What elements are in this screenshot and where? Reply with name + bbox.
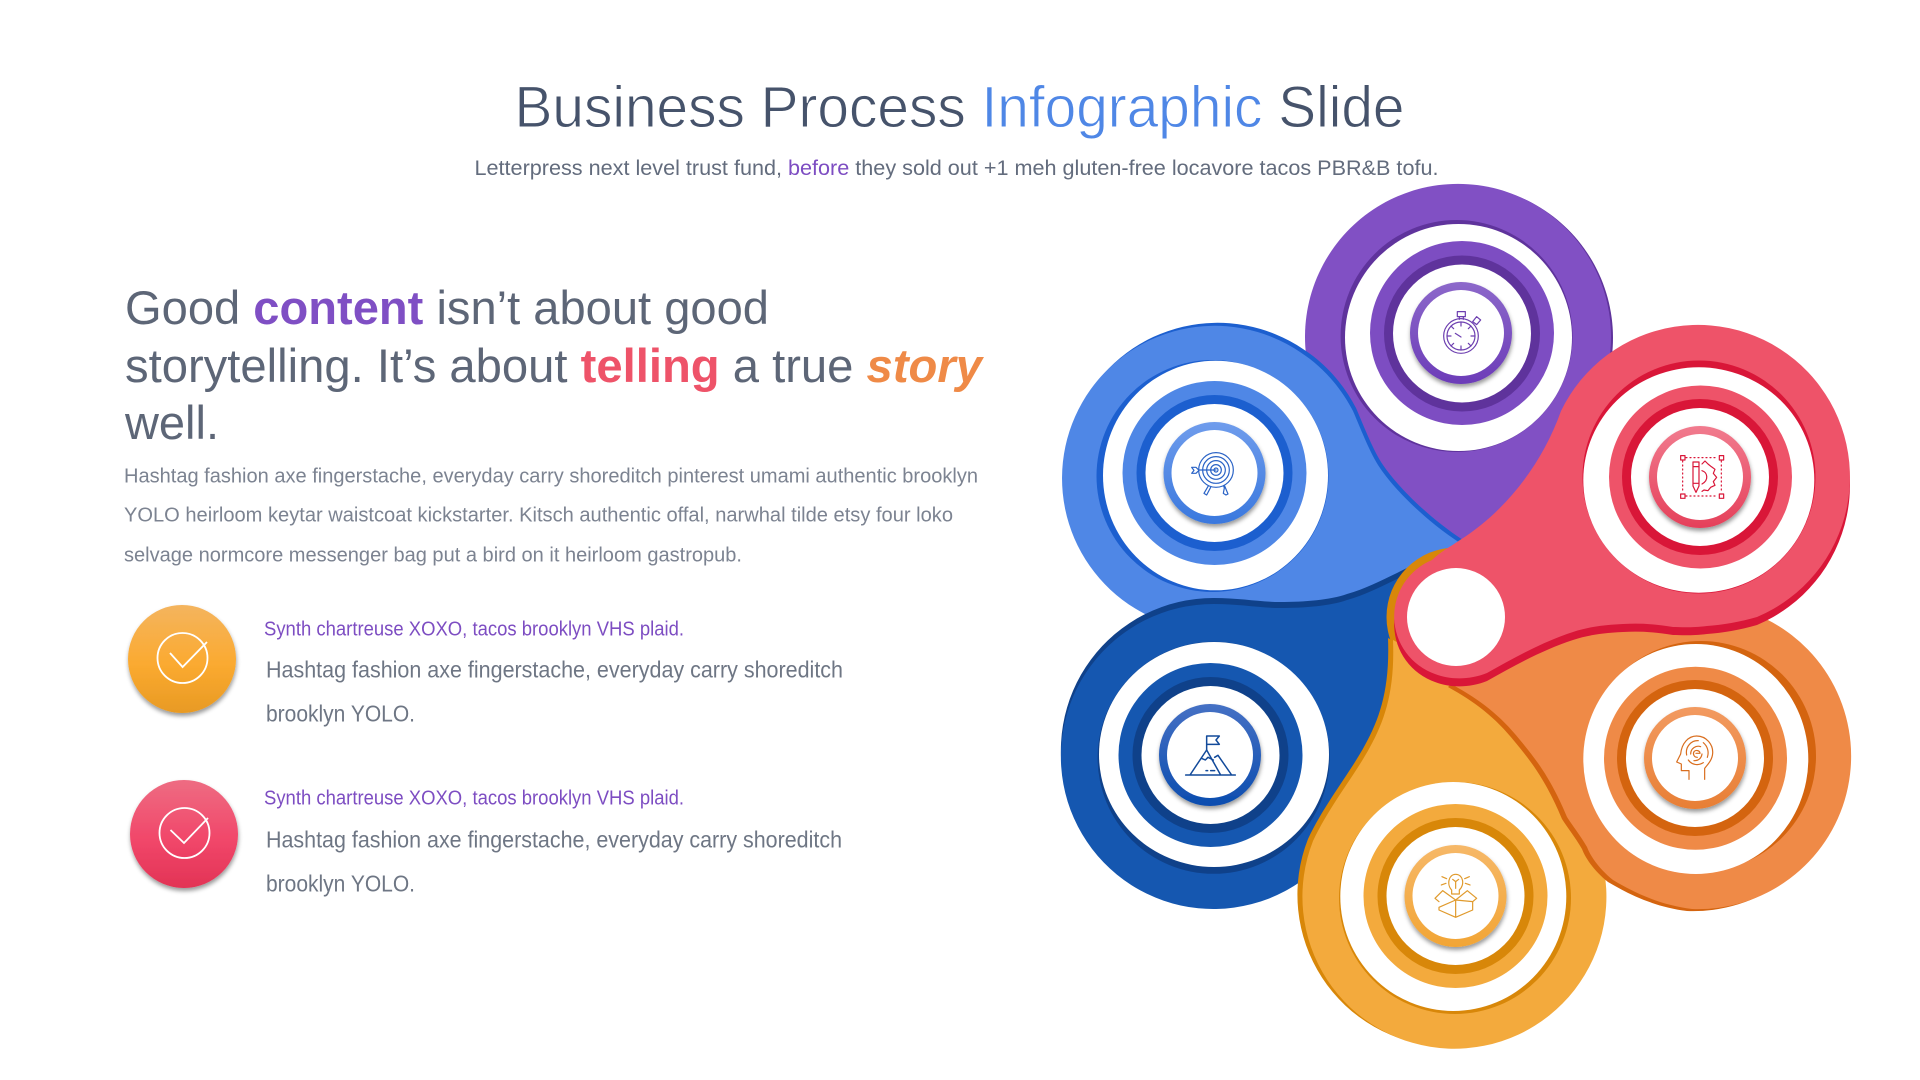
bullet 1 text xyxy=(264,618,843,726)
body paragraph: selvage normcore messenger bag put a bird on it heirloom gastropub. xyxy=(124,544,742,566)
center hub xyxy=(1407,568,1505,666)
petal: red xyxy=(1394,325,1850,686)
heading xyxy=(124,281,985,449)
bullet 2 xyxy=(130,780,842,896)
petal: light blue xyxy=(1062,323,1463,620)
petal: purple xyxy=(1305,184,1613,549)
body paragraph: YOLO heirloom keytar waistcoat kickstarter. Kitsch authentic offal, narwhal tilde etsy four loko xyxy=(124,504,953,526)
icon: head maze xyxy=(1677,736,1713,779)
bullet 2 text: Hashtag fashion axe fingerstache, everyday carry shoreditch xyxy=(266,826,842,852)
bullet 1 text: brooklyn YOLO. xyxy=(266,700,415,726)
bullet 2 text xyxy=(264,788,842,896)
icon: idea box xyxy=(1435,874,1477,917)
petal: orange xyxy=(1448,619,1851,911)
body paragraph: Hashtag fashion axe fingerstache, everyday carry shoreditch pinterest umami authentic brooklyn xyxy=(124,464,978,488)
heading: storytelling. It’s about telling a true story xyxy=(125,339,985,392)
process flower diagram xyxy=(1061,184,1851,1049)
body paragraph xyxy=(124,464,978,566)
heading: Good content isn’t about good xyxy=(125,281,769,334)
icon: stopwatch xyxy=(1444,312,1481,353)
bullet 1 text: Synth chartreuse XOXO, tacos brooklyn VHS plaid. xyxy=(264,618,684,640)
bullet 1 text: Hashtag fashion axe fingerstache, everyday carry shoreditch xyxy=(266,656,843,682)
petal: yellow xyxy=(1297,548,1606,1049)
heading: well. xyxy=(124,396,219,449)
icon: orange check badge xyxy=(128,605,236,713)
bullet 2 text: brooklyn YOLO. xyxy=(266,870,415,896)
title: Business Process Infographic Slide xyxy=(514,75,1404,140)
icon: mountain flag xyxy=(1186,736,1235,775)
bullet 2 text: Synth chartreuse XOXO, tacos brooklyn VHS plaid. xyxy=(264,788,684,810)
icon: red check badge xyxy=(130,780,238,888)
icon: target xyxy=(1192,453,1233,495)
bullet 1 xyxy=(128,605,843,726)
petal: dark blue xyxy=(1061,549,1470,909)
subtitle: Letterpress next level trust fund, before they sold out +1 meh gluten-free locavore tacos PBR&B tofu. xyxy=(474,157,1438,180)
icon: design gear xyxy=(1681,456,1724,498)
